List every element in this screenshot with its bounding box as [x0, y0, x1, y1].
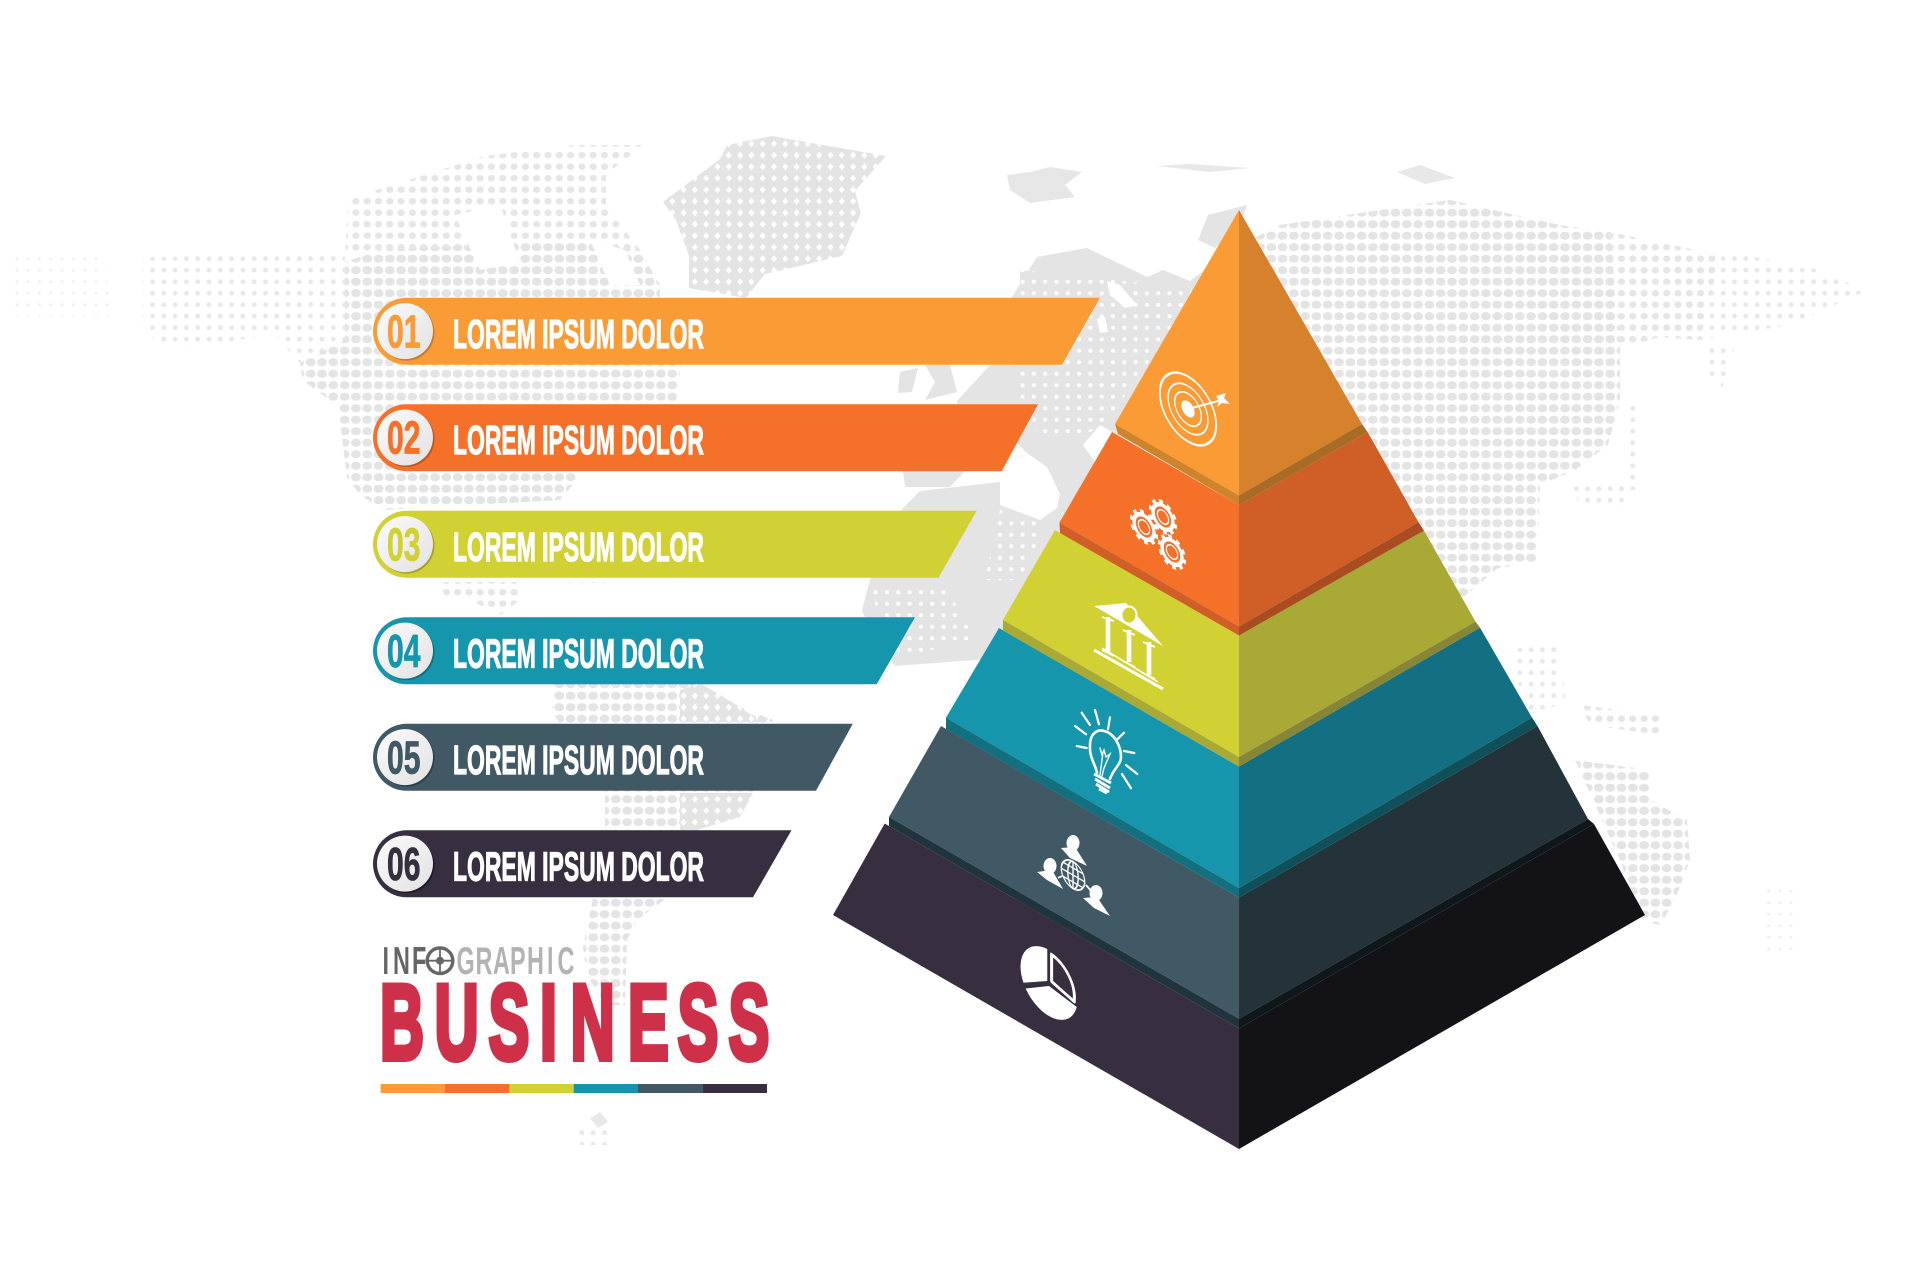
icon: crosshair letter O — [426, 947, 454, 974]
layer 5: people network — [889, 726, 1594, 1028]
icon: bank building — [1094, 603, 1163, 689]
title block — [380, 939, 769, 1093]
banner 04 — [373, 617, 915, 684]
number 03: 03 — [387, 518, 420, 570]
icon: people and globe — [1037, 835, 1110, 916]
colour bar — [381, 1084, 767, 1093]
map: Asia — [1230, 165, 1866, 958]
heading: INFOGRAPHIC: INF — [383, 939, 426, 982]
map: Europe and Africa — [862, 164, 1250, 666]
layer 4: light bulb — [946, 628, 1538, 898]
layer 6: pie chart — [833, 824, 1645, 1149]
pyramid — [833, 210, 1645, 1149]
label 02: LOREM IPSUM DOLOR — [453, 417, 704, 463]
heading: INFOGRAPHIC: GRAPHIC — [456, 939, 574, 982]
number 06: 06 — [387, 838, 420, 890]
label 04: LOREM IPSUM DOLOR — [453, 630, 704, 676]
map: South America — [552, 683, 773, 1145]
icon: pie chart — [1021, 934, 1077, 1032]
number 04: 04 — [387, 625, 421, 677]
banner 02 — [373, 404, 1038, 471]
label 05: LOREM IPSUM DOLOR — [453, 737, 704, 783]
icon: target with arrow — [1160, 360, 1230, 458]
banner 05 — [373, 724, 853, 791]
background: dotted world map — [13, 136, 1866, 1145]
layer 1: target — [1115, 210, 1368, 505]
map: Australia — [1575, 760, 1690, 925]
layer 3: bank building — [1003, 530, 1480, 766]
banner 06 — [373, 830, 792, 897]
label 06: LOREM IPSUM DOLOR — [453, 843, 704, 889]
icon: light bulb — [1075, 710, 1137, 793]
heading: BUSINESS: BUSINESS — [380, 963, 769, 1082]
number 05: 05 — [387, 731, 420, 783]
label 01: LOREM IPSUM DOLOR — [453, 311, 704, 357]
banner 01 — [373, 298, 1100, 365]
banner 03 — [373, 511, 977, 578]
icon: gears — [1131, 495, 1185, 574]
map: North America — [13, 136, 886, 615]
layer 2: gears — [1060, 432, 1424, 636]
label 03: LOREM IPSUM DOLOR — [453, 524, 704, 570]
number 01: 01 — [387, 305, 420, 357]
number 02: 02 — [387, 412, 420, 464]
heading: INFOGRAPHIC — [382, 939, 574, 982]
